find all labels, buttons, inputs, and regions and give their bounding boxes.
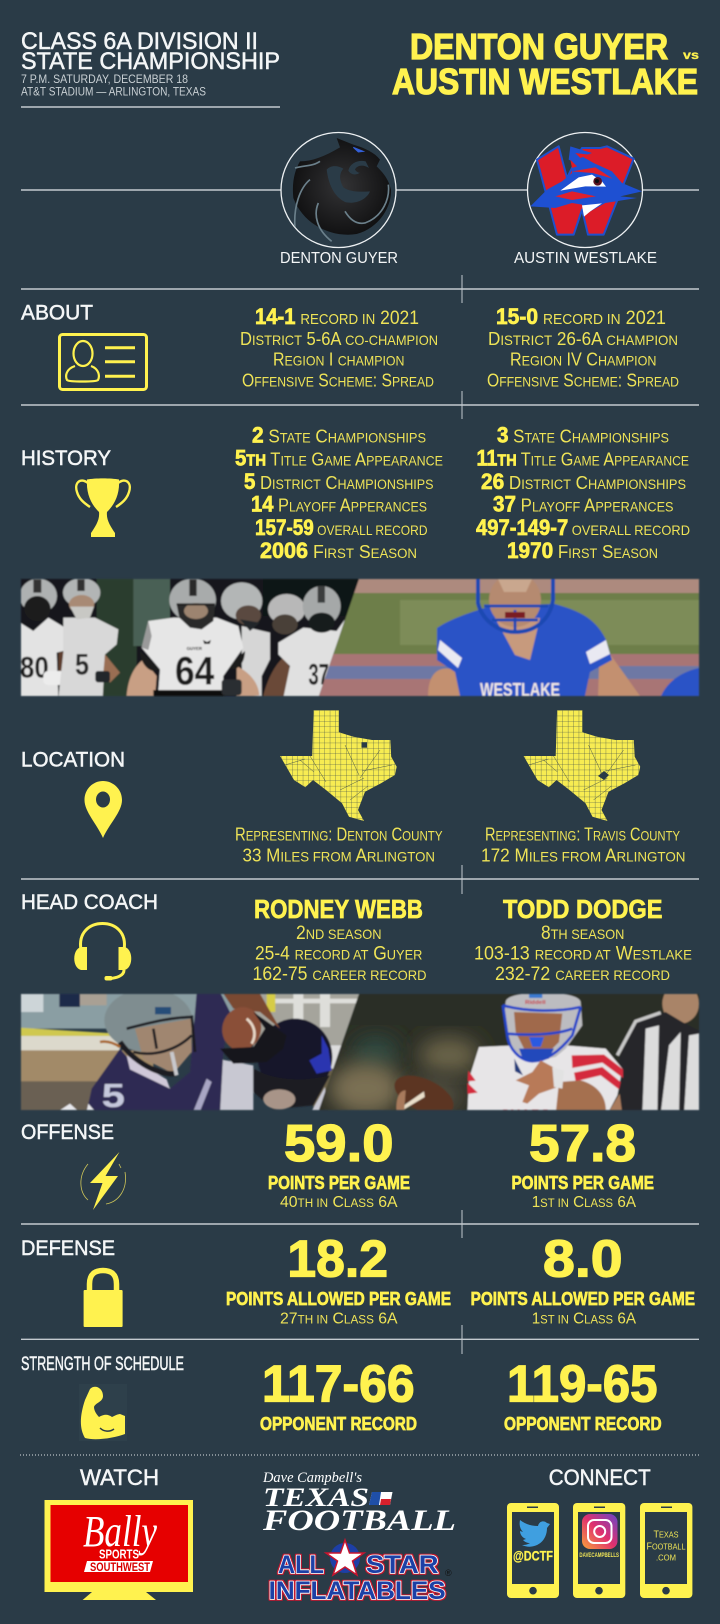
team name labels: DENTON GUYER [280, 250, 398, 267]
logo: Dave Campbell's Texas Football: TEXAS [263, 1483, 369, 1512]
logo: All Star Inflatables: STAR [366, 1551, 438, 1579]
heading: connect: CONNECT [549, 1465, 651, 1490]
matchup headline: vs [683, 48, 699, 62]
Westlake about text: REGION IV CHAMPION [510, 350, 656, 370]
team logo: Denton Guyer panther [281, 132, 396, 248]
photo banner: Guyer and Westlake players: WESTLAKE [480, 680, 560, 700]
game title [21, 28, 280, 75]
Guyer history text: 5 DISTRICT CHAMPIONSHIPS [244, 469, 434, 494]
Guyer about text [240, 304, 438, 391]
photo banner: Guyer ball carrier and Westlake quarterback: 5 [102, 1078, 125, 1115]
logo: Dave Campbell's Texas Football [262, 1470, 456, 1537]
quarterback [467, 1045, 622, 1114]
logo: All Star Inflatables: ® [445, 1568, 452, 1578]
icon: trophy [76, 478, 130, 537]
game title: STATE CHAMPIONSHIP [21, 48, 280, 75]
photo banner: Guyer ball carrier and Westlake quarterback [20, 993, 700, 1111]
icon: tv with Bally Sports Southwest logo [44, 1500, 193, 1600]
icon: phone with website: .COM [656, 1553, 676, 1563]
Guyer coach text: 2ND SEASON [296, 923, 382, 944]
Westlake coach text: 232-72 CAREER RECORD [495, 964, 670, 985]
Westlake history text: 26 DISTRICT CHAMPIONSHIPS [481, 469, 686, 494]
Guyer offense stats [268, 1115, 410, 1211]
Guyer coach text [252, 894, 426, 985]
icon: phone with website: FOOTBALL [646, 1540, 686, 1552]
Westlake coach text: TODD DODGE [503, 894, 662, 924]
header: game info [21, 26, 699, 107]
Westlake about text [487, 304, 679, 391]
heading: location: LOCATION [21, 749, 125, 772]
Westlake defense stats [471, 1231, 695, 1328]
logo: All Star Inflatables: INFLATABLES [269, 1577, 446, 1605]
logo: Dave Campbell's Texas Football: FOOTBALL [262, 1504, 456, 1537]
panel: offense [21, 1115, 654, 1211]
Guyer about text: REGION I CHAMPION [273, 350, 404, 370]
icon: lightning bolt [81, 1152, 126, 1210]
map: Texas with Travis County [522, 708, 644, 824]
photo banner: Guyer ball carrier and Westlake quarterback: Riddell [525, 1000, 546, 1006]
photo banner: Guyer and Westlake players: GUYER [187, 646, 203, 651]
icon: phone with Instagram [573, 1503, 625, 1598]
panel: watch [44, 1465, 193, 1600]
icon: tv with Bally Sports Southwest logo: SPORTS [99, 1546, 139, 1562]
Guyer defense stats: 18.2 [287, 1231, 388, 1289]
logo: All Star Inflatables [269, 1540, 452, 1605]
Guyer location text: 33 MILES FROM ARLINGTON [242, 846, 435, 866]
Westlake about text: DISTRICT 26-6A CHAMPION [488, 329, 678, 349]
icon: phone with Twitter [507, 1503, 559, 1598]
Guyer defense stats: POINTS ALLOWED PER GAME [226, 1289, 451, 1309]
Westlake history text: 497-149-7 OVERALL RECORD [476, 515, 690, 540]
Westlake coach text: 103-13 RECORD AT WESTLAKE [474, 943, 692, 964]
Guyer coach text: 25-4 RECORD AT GUYER [255, 943, 422, 964]
ball carrier [87, 992, 230, 1114]
Guyer offense stats: 40TH IN CLASS 6A [280, 1194, 398, 1211]
icon: phone with website: TEXAS [654, 1529, 679, 1541]
Guyer coach text: 162-75 CAREER RECORD [252, 964, 426, 985]
Westlake schedule stats: 119-65 [507, 1356, 658, 1414]
Westlake location text: REPRESENTING: TRAVIS COUNTY [485, 825, 681, 845]
icon: tv with Bally Sports Southwest logo: SOUTHWEST [90, 1562, 150, 1574]
Westlake offense stats: POINTS PER GAME [512, 1173, 654, 1193]
Guyer history text: 157-59 OVERALL RECORD [255, 515, 428, 540]
Westlake history text [476, 423, 690, 563]
opponent [217, 1059, 253, 1114]
Guyer history text: 14 PLAYOFF APPERANCES [251, 492, 427, 517]
Guyer defense stats: 27TH IN CLASS 6A [280, 1311, 398, 1328]
icon: Texas flag [369, 1492, 392, 1505]
Westlake history text: 1970 FIRST SEASON [507, 538, 658, 563]
team name labels: AUSTIN WESTLAKE [514, 250, 657, 267]
panel: history [21, 423, 690, 563]
icon: phone with Twitter: @DCTF [513, 1548, 553, 1564]
icon: map pin [84, 781, 122, 838]
Westlake offense stats: 1ST IN CLASS 6A [532, 1194, 637, 1211]
panel: connect [507, 1465, 692, 1598]
Westlake about text: 15-0 RECORD IN 2021 [496, 304, 666, 329]
Guyer coach text: RODNEY WEBB [254, 894, 423, 924]
photo banner: Guyer and Westlake players: 5 [75, 648, 89, 681]
matchup headline [392, 26, 699, 102]
photo banner: Guyer and Westlake players [20, 573, 700, 700]
Westlake about text: OFFENSIVE SCHEME: SPREAD [487, 371, 679, 391]
game title: CLASS 6A DIVISION II [21, 28, 258, 55]
football [394, 1075, 454, 1110]
heading: defense: DEFENSE [21, 1237, 115, 1260]
Westlake coach text: 8TH SEASON [541, 923, 624, 944]
heading: watch: WATCH [80, 1465, 159, 1490]
map: Texas with Denton County [278, 708, 400, 824]
team logo: Austin Westlake chaparral [528, 132, 642, 248]
Westlake defense stats: 1ST IN CLASS 6A [532, 1311, 637, 1328]
Westlake schedule stats: OPPONENT RECORD [504, 1414, 662, 1434]
date and venue: AT&T STADIUM — ARLINGTON, TEXAS [21, 86, 206, 98]
photo banner: Guyer ball carrier and Westlake quarterback: CHAPS [500, 1108, 550, 1120]
Guyer location text: REPRESENTING: DENTON COUNTY [235, 825, 443, 845]
photo banner: Guyer and Westlake players: 80 [20, 652, 49, 685]
Westlake history text: 37 PLAYOFF APPERANCES [493, 492, 674, 517]
Guyer schedule stats: 117-66 [262, 1356, 415, 1414]
Guyer schedule stats: OPPONENT RECORD [260, 1414, 417, 1434]
logo: Dave Campbell's Texas Football: Dave Campbell's [262, 1470, 362, 1486]
Guyer history text: 5TH TITLE GAME APPEARANCE [235, 446, 443, 471]
Guyer defense stats [226, 1231, 451, 1328]
date and venue [21, 74, 206, 98]
heading: offense: OFFENSE [21, 1121, 114, 1144]
heading: history: HISTORY [21, 447, 111, 470]
Guyer offense stats: POINTS PER GAME [268, 1173, 410, 1193]
Westlake coach text [474, 894, 692, 985]
photo banner: Guyer and Westlake players: 64 [175, 650, 215, 694]
Westlake offense stats: 57.8 [529, 1115, 636, 1173]
player 30 [20, 616, 64, 698]
Guyer location text [235, 825, 443, 866]
panel: location [21, 708, 686, 866]
logo: All Star Inflatables: ALL [278, 1551, 324, 1579]
icon: id card [60, 334, 146, 390]
heading: about: ABOUT [21, 302, 93, 324]
heading: strength of schedule: STRENGTH OF SCHEDULE [21, 1354, 184, 1375]
back players [242, 626, 270, 698]
Guyer history text [235, 423, 443, 563]
panel: about [21, 302, 679, 391]
panel: strength of schedule [21, 1354, 662, 1441]
Westlake history text: 11TH TITLE GAME APPEARANCE [476, 446, 689, 471]
Westlake location text [481, 825, 686, 866]
Guyer offense stats: 59.0 [284, 1115, 394, 1173]
referee [610, 1093, 623, 1111]
icon: tv with Bally Sports Southwest logo: Bally [83, 1507, 157, 1556]
Westlake offense stats [512, 1115, 654, 1211]
Guyer history text: 2006 FIRST SEASON [260, 538, 417, 563]
date and venue: 7 P.M. SATURDAY, DECEMBER 18 [21, 74, 188, 86]
icon: flexed arm [79, 1384, 127, 1441]
heading: head coach: HEAD COACH [21, 891, 158, 914]
matchup headline: DENTON GUYER [410, 26, 668, 67]
icon: headset [74, 924, 131, 980]
icon: phone with website [640, 1503, 692, 1598]
Guyer about text: 14-1 RECORD IN 2021 [255, 304, 419, 329]
panel: defense [21, 1231, 695, 1328]
icon: padlock [84, 1270, 123, 1327]
Westlake location text: 172 MILES FROM ARLINGTON [481, 846, 686, 866]
Guyer history text: 2 STATE CHAMPIONSHIPS [252, 423, 426, 448]
Guyer about text: OFFENSIVE SCHEME: SPREAD [242, 371, 434, 391]
photo banner: Guyer and Westlake players: 37 [308, 658, 329, 691]
Westlake defense stats: 8.0 [543, 1231, 623, 1289]
player 5 [58, 618, 118, 698]
Guyer about text: DISTRICT 5-6A CO-CHAMPION [240, 329, 438, 349]
team name labels [280, 250, 657, 267]
panel: head coach [21, 891, 692, 985]
Westlake history text: 3 STATE CHAMPIONSHIPS [497, 423, 669, 448]
player 64 [127, 659, 157, 698]
icon: phone with Instagram: DAVECAMPBELLS [579, 1553, 619, 1559]
